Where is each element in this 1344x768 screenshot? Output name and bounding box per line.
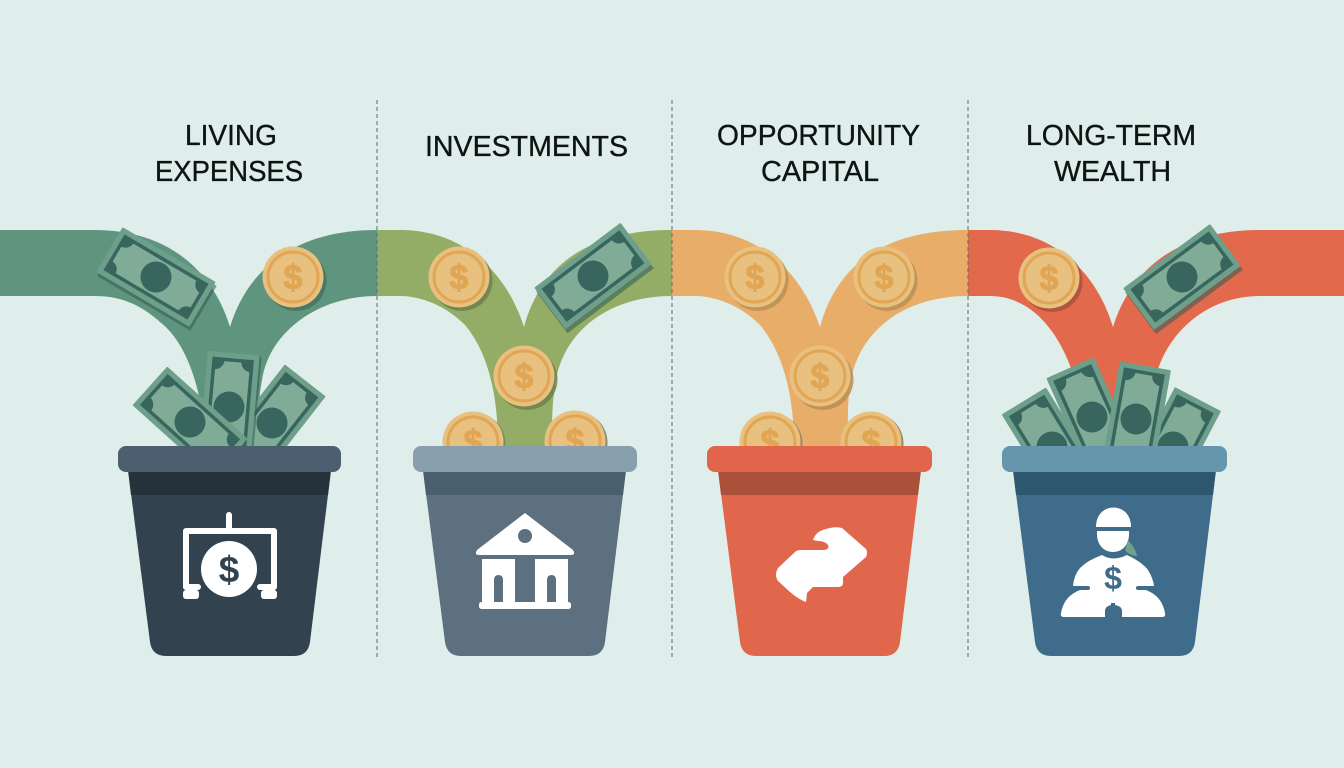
heading: living expenses: LIVING <box>185 120 277 152</box>
falling coin: long-term wealth: $ <box>1040 260 1059 298</box>
heading: long-term wealth <box>1026 120 1196 188</box>
flow: living expenses <box>0 230 377 446</box>
icon: person with dollar: $ <box>1104 560 1122 596</box>
heading: living expenses: EXPENSES <box>155 156 303 188</box>
falling coin: opportunity left: $ <box>746 259 765 297</box>
divider 1 <box>376 100 378 657</box>
flow: long-term wealth <box>968 230 1344 420</box>
bucket: long-term wealth <box>1002 446 1227 656</box>
heading: long-term wealth: WEALTH <box>1054 156 1171 188</box>
bills in bucket: living expenses <box>130 349 328 484</box>
heading: long-term wealth: LONG-TERM <box>1026 120 1196 152</box>
falling coin: investments left <box>428 246 492 311</box>
coin in bucket: opportunity right: $ <box>862 424 881 462</box>
icon: money frame: $ <box>219 549 240 590</box>
falling coin: opportunity centre <box>790 346 854 410</box>
heading: living expenses <box>155 120 303 188</box>
coin in bucket: opportunity left: $ <box>761 424 780 462</box>
heading: opportunity capital <box>717 120 920 188</box>
bucket: living expenses <box>118 446 341 656</box>
coin in bucket: investments left <box>442 412 506 474</box>
falling coin: opportunity right: $ <box>875 259 894 297</box>
icon: money frame <box>183 515 277 599</box>
icon: swap arrows <box>776 527 867 602</box>
falling coin: opportunity left <box>724 246 788 311</box>
flow: investments <box>377 230 672 446</box>
heading: opportunity capital: OPPORTUNITY <box>717 120 920 152</box>
heading: investments: INVESTMENTS <box>425 131 628 163</box>
falling coin: opportunity right <box>854 246 918 311</box>
falling coin: long-term wealth <box>1018 248 1082 312</box>
bucket: investments <box>413 446 637 656</box>
coin: living expenses <box>262 246 326 311</box>
falling bill: long-term wealth <box>1121 222 1243 334</box>
divider 3 <box>967 100 969 657</box>
falling coin: investments centre <box>494 346 558 410</box>
falling coin: investments left: $ <box>450 259 469 297</box>
coin in bucket: investments right <box>544 410 608 473</box>
divider 2 <box>671 100 673 657</box>
falling coin: investments centre: $ <box>515 358 534 396</box>
heading: opportunity capital: CAPITAL <box>761 156 879 188</box>
coin: living expenses: $ <box>284 259 303 297</box>
coin in bucket: investments right: $ <box>566 423 585 461</box>
falling coin: opportunity centre: $ <box>811 358 830 396</box>
falling bill: living expenses <box>94 225 218 331</box>
coin in bucket: investments left: $ <box>464 424 483 462</box>
coin in bucket: opportunity left <box>740 412 802 474</box>
icon: person with dollar <box>1061 508 1165 617</box>
flow: opportunity capital <box>672 230 968 446</box>
icon: bank <box>476 513 574 609</box>
coin in bucket: opportunity right <box>840 412 904 474</box>
falling bill: investments <box>532 221 654 333</box>
bucket: opportunity capital <box>707 446 932 656</box>
bills in bucket: long-term wealth <box>1000 355 1223 509</box>
